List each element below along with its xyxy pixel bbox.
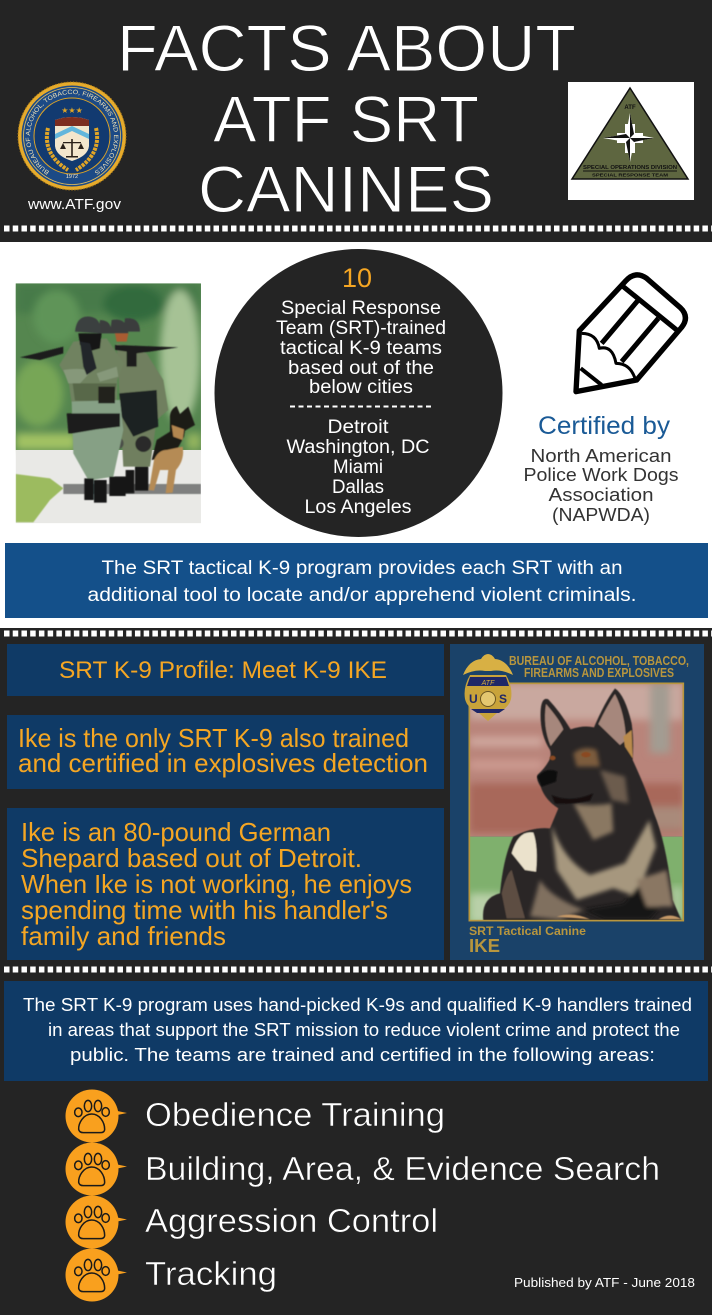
panel: about Ike: When Ike is not working, he enjoys [21,869,412,899]
city list: Los Angeles [304,497,412,518]
label: tracking: Tracking [145,1255,277,1292]
certification: North American [530,445,672,466]
card caption: IKE [469,936,500,956]
training summary band: in areas that support the SRT mission to reduce violent crime and protect the [48,1020,680,1040]
circle: team cities [214,249,502,537]
publication credit: Published by ATF - June 2018 [514,1275,695,1290]
city list: Detroit [328,417,389,438]
icon: ATF K-9 badge: S [499,692,507,706]
icon: SRT triangle badge [568,82,694,200]
panel: K-9 profile heading: SRT K-9 Profile: Meet K-9 IKE [59,657,387,684]
photo: SRT team with K-9 [13,283,201,523]
icon: paw 3 [66,1196,127,1248]
label: building, area and evidence search: Building, Area, & Evidence Search [145,1150,660,1187]
panel: about Ike: family and friends [21,921,226,951]
city list: Washington, DC [286,437,430,458]
training summary band: public. The teams are trained and certified in the following areas: [70,1045,655,1065]
team description [276,298,446,398]
card caption: SRT Tactical Canine [469,926,586,938]
team description: Special Response [281,298,441,319]
panel: about Ike [7,808,444,960]
website label: www.ATF.gov [27,196,122,213]
photo: K-9 Ike [469,683,683,923]
team count: 10 [342,263,372,293]
city list: Dallas [332,477,384,498]
label: aggression control: Aggression Control [145,1202,438,1239]
panel: explosives detection: Ike is the only SRT K-9 also trained [18,723,409,753]
training summary band [4,981,708,1081]
program summary band: The SRT tactical K-9 program provides each SRT with an [102,558,622,579]
certification: Association [548,484,654,505]
team description: Team (SRT)-trained [276,318,446,339]
training summary band: The SRT K-9 program uses hand-picked K-9s and qualified K-9 handlers trained [23,995,692,1015]
card heading [509,653,689,680]
certification: (NAPWDA) [552,504,650,525]
certification [524,412,678,525]
icon: ATF K-9 badge: U [469,692,478,706]
panel: explosives detection [7,715,444,789]
panel: Ike trading card [450,644,704,960]
icon: paw 1 [66,1090,127,1142]
icon: ATF seal: 1972 [66,174,78,180]
icon: SRT triangle badge: SPECIAL OPERATIONS DIVISION [583,165,677,171]
icon: ATF seal: BUREAU OF ALCOHOL, TOBACCO, FIREARMS AND EXPLOSIVES [26,90,118,175]
icon: ATF seal [18,82,126,190]
certification: Certified by [538,412,671,440]
card heading: FIREARMS AND EXPLOSIVES [524,665,674,680]
icon: ATF seal: ★★★ [61,106,83,115]
panel: explosives detection: and certified in explosives detection [18,748,428,778]
label: obedience training: Obedience Training [145,1096,445,1133]
card caption [469,926,586,956]
header panel [18,11,694,226]
program summary band: additional tool to locate and/or apprehend violent criminals. [88,585,636,606]
panel: about Ike: spending time with his handler's [21,895,388,925]
title: CANINES [198,152,494,226]
city list: Miami [333,457,383,478]
title [117,11,576,226]
title: FACTS ABOUT [117,11,576,85]
city list [286,417,430,518]
panel: about Ike: Ike is an 80-pound German [21,817,331,847]
panel: K-9 profile heading [7,644,444,696]
icon: ATF K-9 badge [463,654,513,721]
white facts panel [0,242,712,628]
team description: tactical K-9 teams [280,338,442,359]
panel: about Ike: Shepard based out of Detroit. [21,843,362,873]
icon: ATF K-9 badge: ATF [481,680,495,687]
team description: based out of the [288,358,434,379]
team description: below cities [309,377,413,398]
program summary band [5,543,708,618]
icon: pencil [576,275,685,392]
icon: paw 2 [66,1142,127,1196]
title: ATF SRT [213,82,479,156]
icon: paw 4 [66,1248,127,1302]
icon: SRT triangle badge: SPECIAL RESPONSE TEAM [592,172,668,178]
icon: SRT triangle badge: ATF [624,105,636,111]
certification: Police Work Dogs [524,464,678,485]
